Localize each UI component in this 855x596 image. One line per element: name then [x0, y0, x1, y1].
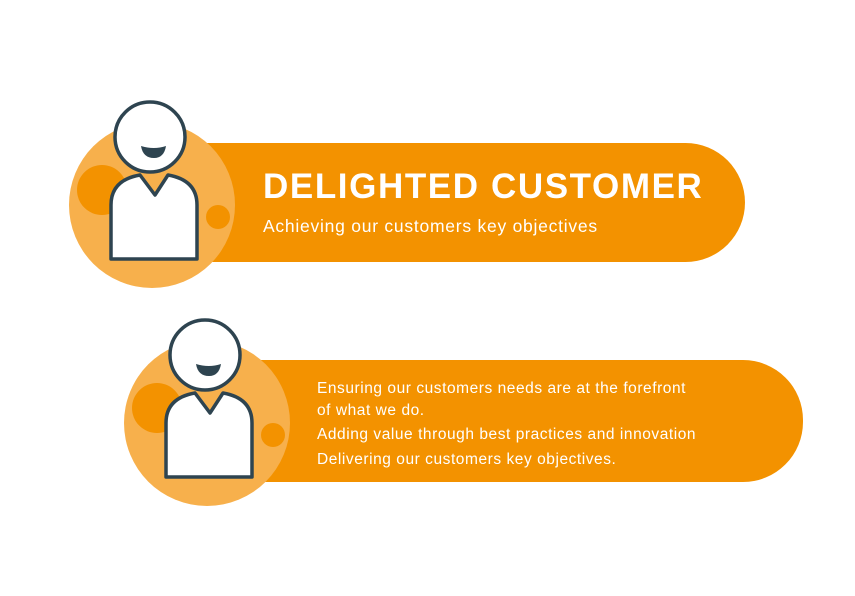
bullet text: of what we do.	[317, 402, 425, 418]
bullet text: Adding value through best practices and innovation	[317, 426, 696, 443]
bullet text: Ensuring our customers needs are at the forefront	[317, 380, 686, 397]
icon: customer 2	[124, 320, 290, 506]
subtitle: Achieving our customers key objectives	[263, 216, 598, 236]
icon: customer 1	[69, 102, 235, 288]
heading: delighted customer: DELIGHTED CUSTOMER	[263, 167, 703, 206]
banner 1	[195, 143, 745, 262]
banner 2	[250, 360, 803, 482]
bullet text	[317, 380, 696, 468]
bullet text: Delivering our customers key objectives.	[317, 450, 616, 468]
